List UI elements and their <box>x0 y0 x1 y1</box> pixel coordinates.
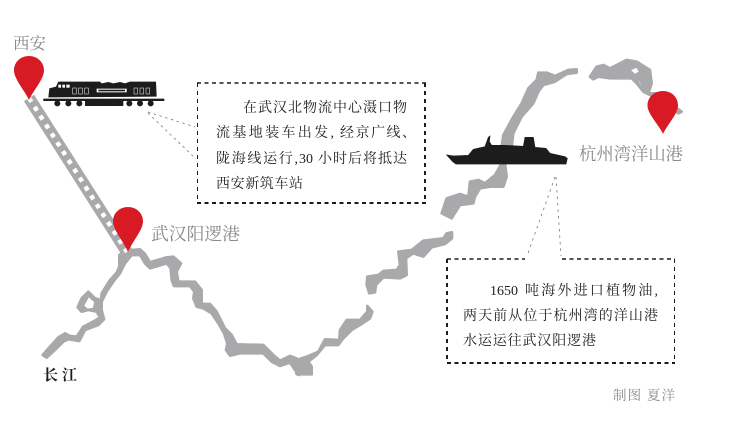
callout: train: 在武汉北物流中心滠口物 <box>243 99 407 116</box>
callout: ship: 两天前从位于杭州湾的洋山港 <box>463 307 658 324</box>
yangtze river, central section <box>280 232 452 374</box>
label: Hangzhou Bay Yangshan port: 杭州湾洋山港 <box>579 144 683 164</box>
callout: train <box>197 83 426 203</box>
callout: train: 30 <box>299 152 313 167</box>
callout leader lines: train <box>148 112 196 159</box>
railway track from Xi'an to Wuhan <box>29 98 127 252</box>
callout: ship <box>447 259 675 363</box>
callout: ship: 1650 <box>490 284 518 299</box>
callout: train: 西安新筑车站 <box>216 175 303 192</box>
pin: Hangzhou Bay Yangshan port <box>648 91 678 134</box>
icon: cargo ship <box>447 136 567 164</box>
label: Yangtze River: 长江 <box>43 367 77 384</box>
callout: train: 小时后将抵达 <box>318 150 407 167</box>
credit line: 制图 夏洋 <box>613 388 676 403</box>
yangtze river, west section <box>43 249 300 375</box>
callout: train: 流基地装车出发, <box>216 124 334 141</box>
pin: Wuhan Yangluo port <box>113 207 143 252</box>
callout: ship: 吨海外进口植物油, <box>525 282 658 299</box>
callout: ship: 水运运往武汉阳逻港 <box>463 332 596 349</box>
callout leader lines: ship <box>527 177 561 256</box>
callout: train: 陇海线运行, <box>216 150 298 167</box>
label: Wuhan Yangluo port: 武汉阳逻港 <box>151 224 241 244</box>
icon: locomotive <box>43 82 164 106</box>
callout: train: 经京广线、 <box>340 124 416 141</box>
label: Xi'an: 西安 <box>13 34 46 53</box>
pin: Xi'an <box>14 56 44 100</box>
yangtze river, eastern section and hangzhou bay <box>442 60 682 218</box>
